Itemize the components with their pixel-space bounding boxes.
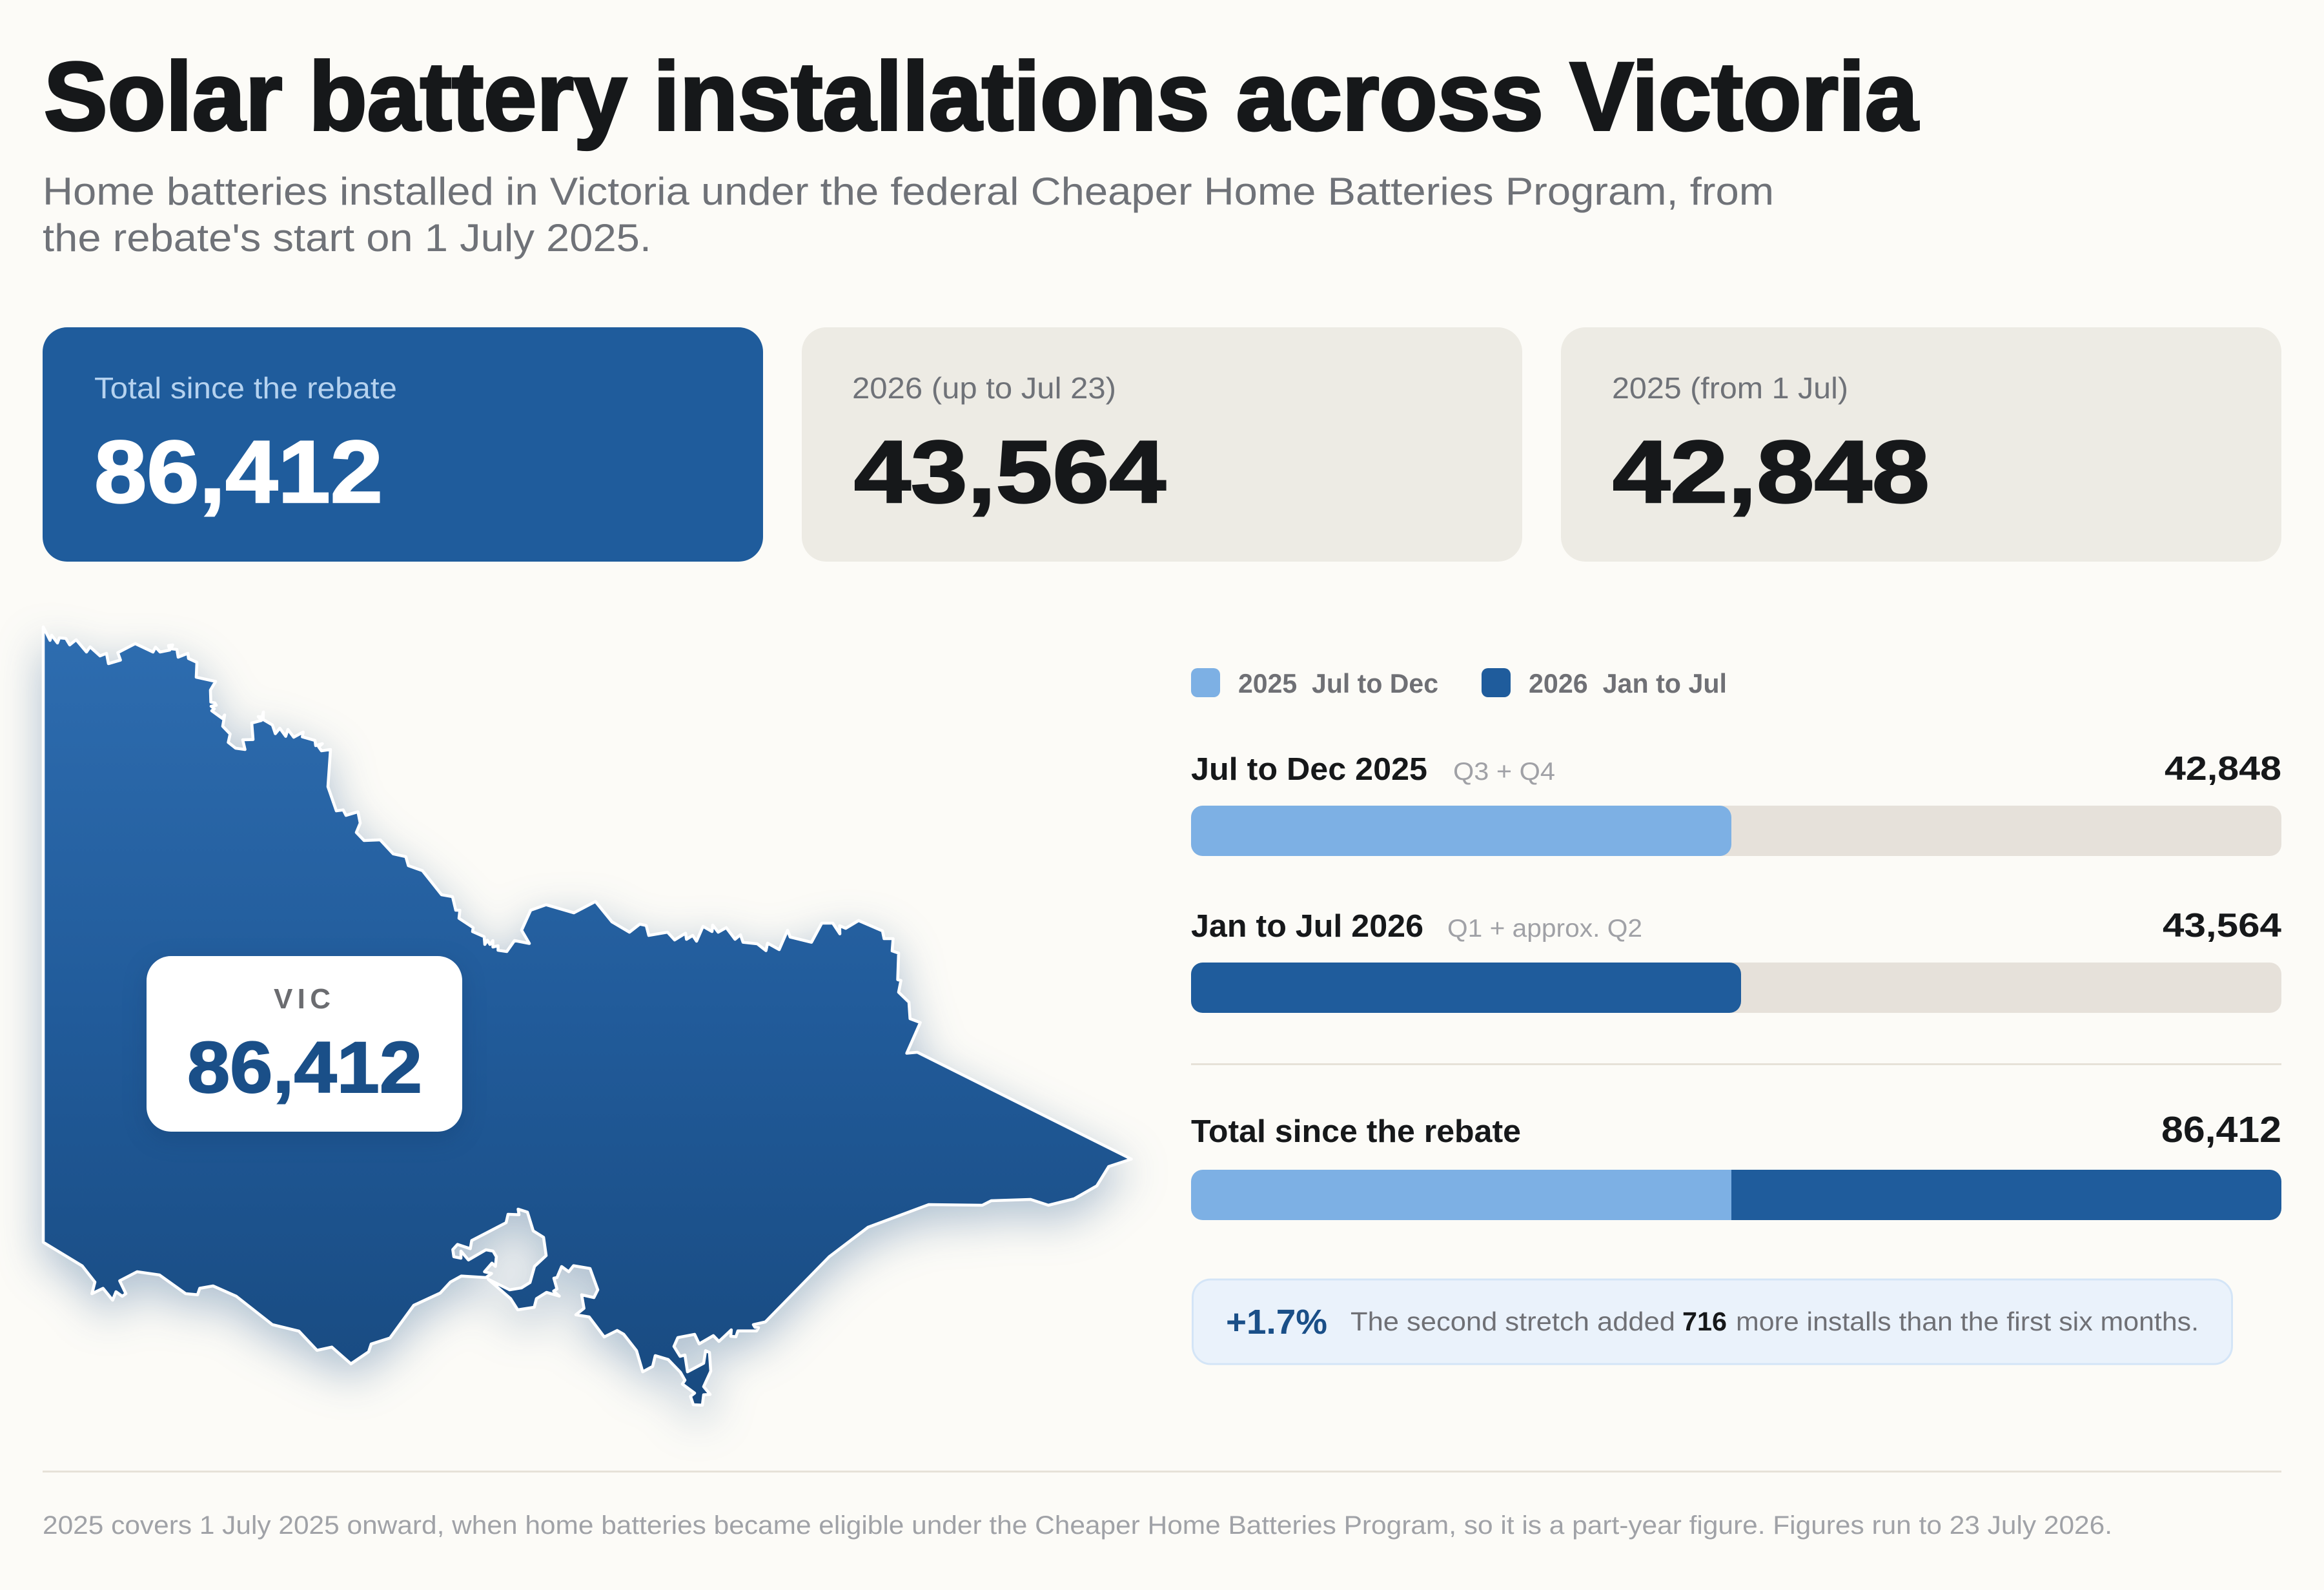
stat card: total since the rebate: 86,412: [94, 423, 383, 522]
stat card: 2026 up to Jul 23: 43,564: [854, 423, 1166, 522]
bar row: total since the rebate: 86,412: [2161, 1109, 2281, 1150]
stat card: 2025 from 1 Jul: [1561, 327, 2281, 562]
footnote: 2025 covers 1 July 2025 onward, when home batteries became eligible under the Cheaper Home Batteries Program, so it is a part-year figure. Figures run to 23 July 2026.: [43, 1511, 2112, 1540]
callout: growth: [1193, 1279, 2232, 1364]
bar row: Jan to Jul 2026: 43,564: [2163, 907, 2281, 944]
bar row: Jan to Jul 2026: Jan to Jul 2026: [1191, 909, 1423, 944]
stat card: 2026 up to Jul 23: [802, 327, 1522, 562]
bar row: Jan to Jul 2026: [1191, 907, 2281, 1013]
stat card: total since the rebate: Total since the rebate: [94, 371, 397, 405]
map label: VIC total: VIC: [274, 983, 331, 1015]
bar row: total since the rebate: [1191, 1109, 2281, 1220]
legend: 2026 Jan to Jul: [1529, 668, 1727, 698]
bar row: Jan to Jul 2026: Q1 + approx. Q2: [1447, 915, 1642, 943]
callout: growth: 716: [1682, 1307, 1727, 1336]
legend: [1191, 668, 1727, 698]
callout: growth: more installs than the first six months.: [1736, 1307, 2199, 1336]
bar row: Jul to Dec 2025: [1191, 750, 2281, 856]
stat card: total since the rebate: [43, 327, 763, 562]
title: Solar battery installations across Victoria: [44, 42, 1919, 150]
bar row: Jul to Dec 2025: Jul to Dec 2025: [1191, 752, 1427, 787]
subtitle: [43, 170, 1774, 260]
map of Victoria: [43, 627, 1131, 1405]
bar row: total since the rebate: Total since the rebate: [1191, 1114, 1521, 1149]
legend: 2025 Jul to Dec: [1238, 668, 1438, 698]
map label: VIC total: [147, 956, 462, 1132]
bar row: Jul to Dec 2025: 42,848: [2165, 750, 2281, 788]
stat card: 2026 up to Jul 23: 2026 (up to Jul 23): [852, 371, 1116, 405]
map label: VIC total: 86,412: [187, 1027, 422, 1108]
stat card: 2025 from 1 Jul: 42,848: [1613, 423, 1930, 522]
subtitle: Home batteries installed in Victoria under the federal Cheaper Home Batteries Program, from: [43, 170, 1774, 213]
callout: growth: +1.7%: [1226, 1303, 1327, 1341]
callout: growth: The second stretch added: [1351, 1307, 1675, 1336]
stat card: 2025 from 1 Jul: 2025 (from 1 Jul): [1612, 371, 1848, 405]
subtitle: the rebate's start on 1 July 2025.: [43, 216, 651, 260]
bar row: Jul to Dec 2025: Q3 + Q4: [1453, 758, 1555, 786]
